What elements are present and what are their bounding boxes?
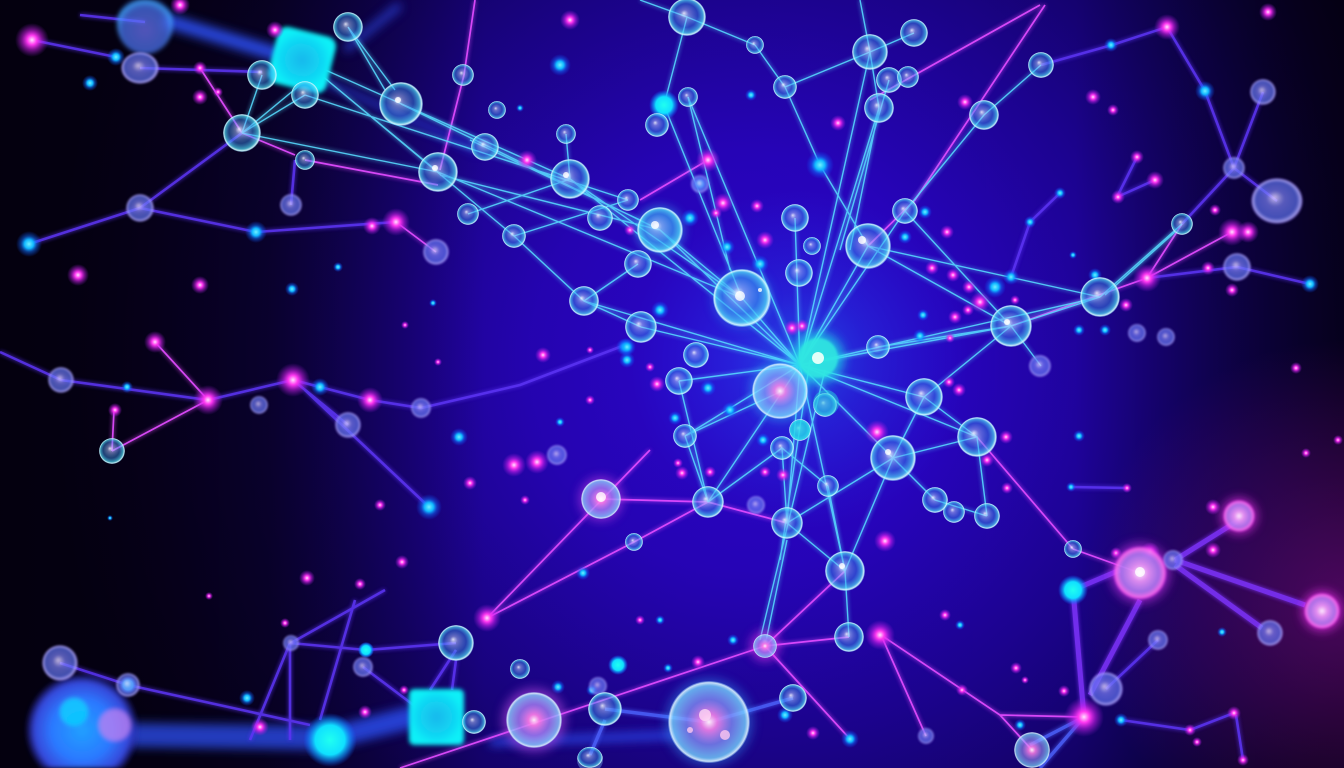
lilac magenta-rim spheres <box>1113 500 1340 629</box>
light beams <box>130 5 680 742</box>
bright cyan nodes <box>119 90 1088 767</box>
cyan glowing squares <box>266 25 464 745</box>
blurred orbs <box>26 0 173 768</box>
sphere highlights <box>395 97 1145 740</box>
cyan links <box>242 0 1182 646</box>
pink-core crystal spheres <box>506 363 1050 768</box>
sphere halos <box>502 206 1342 766</box>
central teal cluster <box>790 338 839 440</box>
